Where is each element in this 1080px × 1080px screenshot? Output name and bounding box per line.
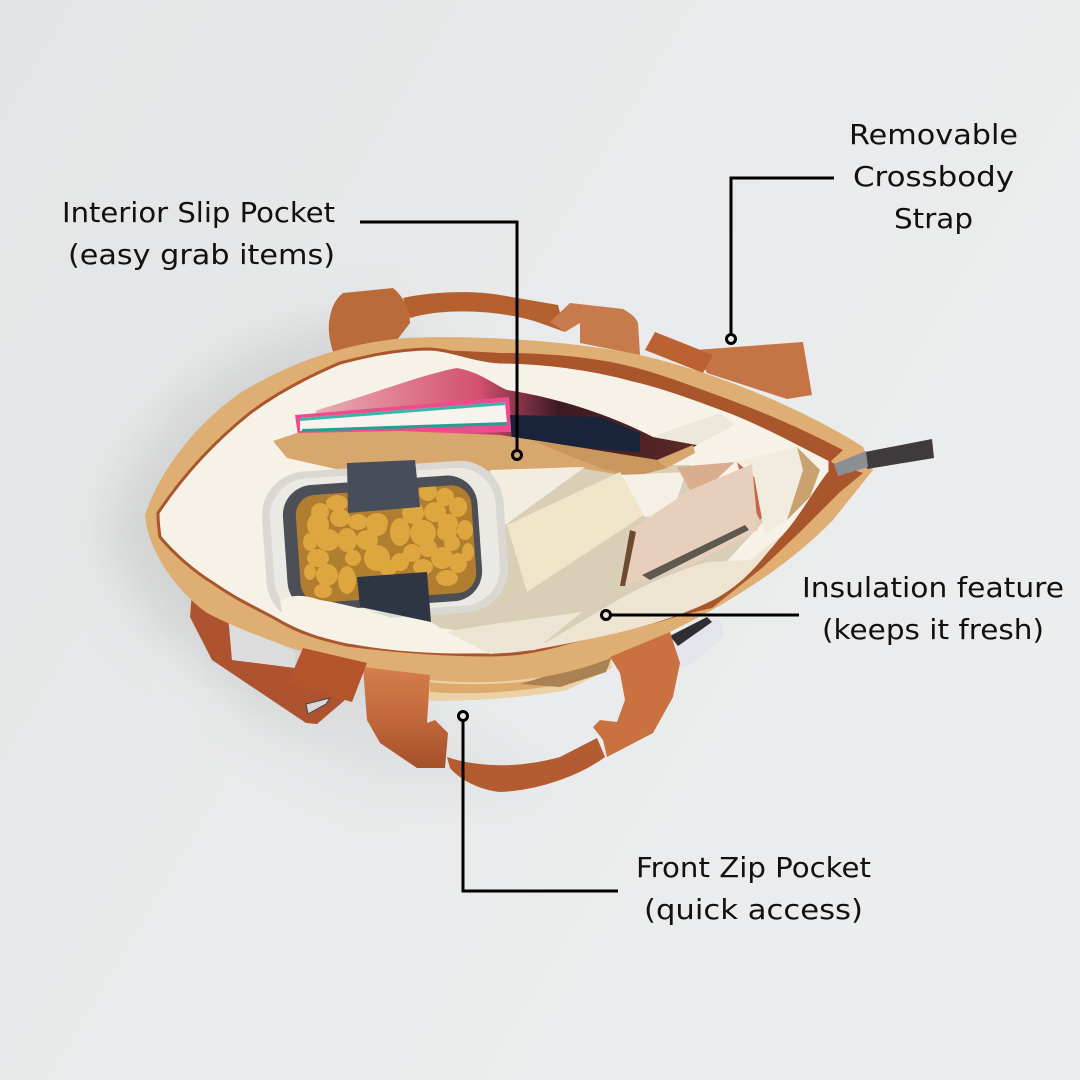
beige side flap [787, 447, 820, 520]
food container [259, 458, 511, 626]
back lining crease [653, 413, 735, 445]
marker [726, 334, 736, 344]
bottom clip [357, 572, 431, 622]
callout: interior slip pocket [62, 196, 522, 460]
crossbody strap [645, 332, 812, 399]
pocket stitched ridge [430, 664, 610, 693]
callout sublabel: (quick access) [644, 893, 863, 926]
marker [458, 712, 468, 720]
zipper band lower [640, 462, 863, 625]
pocket shaded corner [533, 441, 667, 477]
leader line [463, 721, 618, 891]
interior slip pocket [273, 431, 695, 477]
front pocket panel [410, 650, 612, 701]
insulation flap [533, 535, 782, 650]
callout: front zip pocket [458, 712, 871, 926]
device dark edge [670, 617, 712, 646]
callout label: Removable [849, 118, 1018, 151]
right lining panel [733, 447, 803, 535]
bag shadow [105, 319, 560, 790]
pink and dark cavity [300, 368, 697, 468]
callout sublabel: Crossbody [853, 160, 1014, 193]
callout sublabel: (keeps it fresh) [822, 613, 1044, 646]
top clip [347, 460, 420, 513]
front lining pad [280, 596, 483, 653]
pad lump on floor [447, 612, 582, 654]
interior floor [400, 465, 765, 645]
snack pouch [620, 464, 758, 586]
left strap behind bag [190, 592, 345, 724]
callout label: Front Zip Pocket [636, 851, 871, 884]
top handle [329, 288, 640, 355]
front handle [363, 632, 680, 792]
red fold [737, 462, 777, 520]
notebook [295, 397, 512, 436]
callout label: Insulation feature [802, 571, 1064, 604]
bag interior lining [158, 349, 830, 655]
marker [602, 610, 610, 620]
phone in pocket [510, 415, 640, 452]
callout: insulation feature [602, 571, 1064, 646]
callout sublabel: (easy grab items) [68, 238, 335, 271]
callout sublabel: Strap [894, 202, 973, 235]
illustration: open tote bag [145, 288, 934, 792]
zipper band upper [400, 350, 843, 462]
white box back [490, 467, 585, 525]
front tab [288, 648, 367, 702]
silver device [673, 618, 723, 668]
beige box [507, 472, 644, 592]
white box right [620, 472, 686, 517]
marker [512, 450, 522, 460]
pocket dark fold [520, 656, 612, 687]
snacks [303, 483, 474, 598]
leader line [360, 222, 517, 450]
callout label: Interior Slip Pocket [62, 196, 335, 229]
zipper pull [834, 439, 934, 476]
leader line [731, 178, 834, 334]
bag outer shell [145, 337, 873, 682]
tan wrap behind pouch [677, 462, 735, 490]
leader line [611, 614, 799, 616]
callout: crossbody strap [726, 118, 1018, 344]
